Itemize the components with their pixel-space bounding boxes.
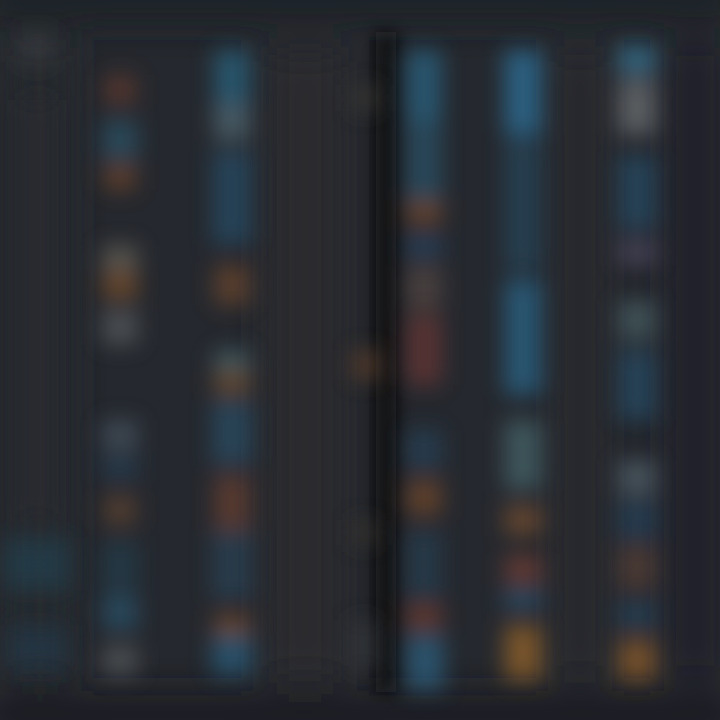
central dark divider xyxy=(376,32,396,692)
column 6: stacked blocks xyxy=(504,50,542,680)
column 4: faint dark column xyxy=(350,85,380,670)
column 3: stacked blocks xyxy=(212,50,252,675)
column 1: faint text column xyxy=(4,32,70,670)
column 2: stacked blocks xyxy=(102,75,138,675)
column 5: stacked blocks xyxy=(406,50,444,690)
column 7: stacked blocks xyxy=(618,45,656,680)
